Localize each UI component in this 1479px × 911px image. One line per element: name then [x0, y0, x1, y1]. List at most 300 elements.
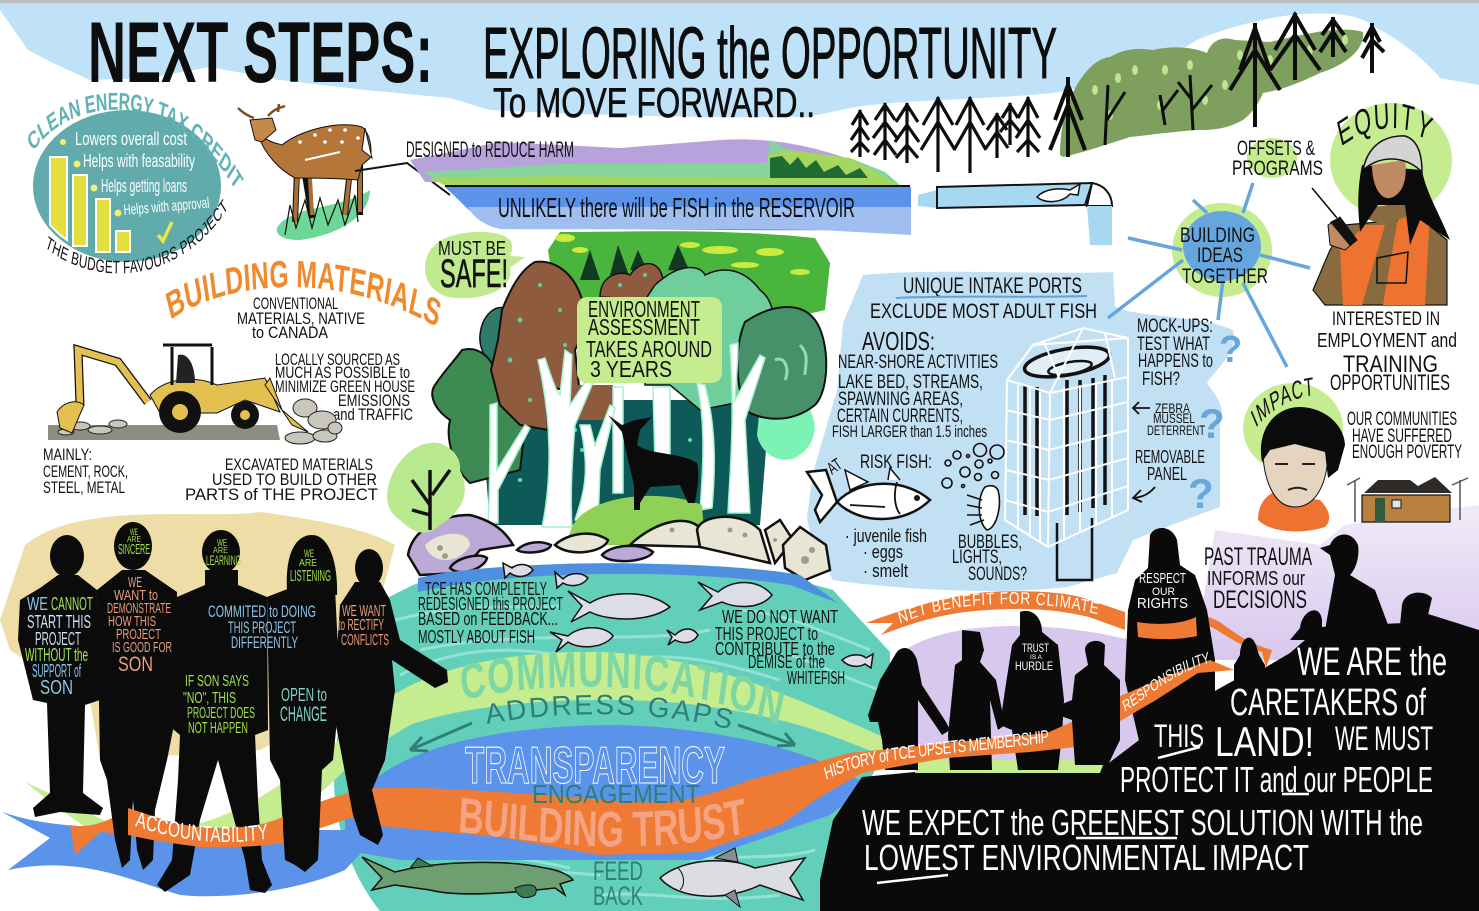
panel: silhouettes of people, left: SINCERE [118, 541, 150, 558]
text: locally sourced [275, 351, 415, 424]
text: removable panel: REMOVABLE [1135, 447, 1205, 467]
text: mock-ups: FISH? [1142, 369, 1180, 390]
cab body [150, 378, 280, 413]
lime circle [1243, 383, 1343, 473]
leader line from deer [355, 163, 450, 195]
figure with long hair [868, 648, 950, 770]
text: locally sourced: MUCH AS POSSIBLE to [275, 364, 410, 382]
text: zebra mussel deterrent: ? [1199, 400, 1225, 447]
black hill [820, 613, 1479, 911]
heading: building materials: BUILDING MATERIALS [166, 260, 440, 325]
rubble rocks right [285, 399, 342, 444]
banner text: NET BENEFIT FOR CLIMATE [898, 592, 1099, 624]
text: we are listening: WE [304, 548, 314, 560]
text: open to change: CHANGE [280, 703, 327, 726]
text: excavated materials: PARTS of THE PROJECT [185, 485, 378, 504]
text: excavated materials: USED TO BUILD OTHER [212, 470, 377, 489]
icon: intake tower [1005, 328, 1128, 580]
text: locally sourced: and TRAFFIC [333, 406, 413, 424]
text: commited to doing [208, 602, 316, 652]
text: avoids list [832, 326, 998, 441]
text: want to demonstrate [107, 574, 172, 676]
panel: impact [1243, 377, 1468, 532]
white cage [1005, 328, 1128, 547]
list of budget benefits: Helps getting loans [101, 176, 187, 196]
sash on tall figure [1137, 617, 1197, 639]
panel: clean energy tax credit [28, 92, 244, 274]
text: respect our rights [1137, 570, 1188, 612]
ribbon in front of figures [128, 808, 283, 847]
text: commited to doing: COMMITED to DOING [208, 602, 316, 621]
text: we are learning: ARE [213, 546, 228, 555]
text: tce redesigned: REDESIGNED this PROJECT [418, 594, 563, 614]
background: purple behind figures [905, 626, 1215, 765]
text: want to demonstrate: SON [118, 653, 153, 676]
callout: must be safe: MUST BE [438, 238, 506, 260]
antlers [238, 104, 285, 118]
text: conventional materials: MATERIALS, NATIVE [237, 309, 365, 328]
text: mainly materials: STEEL, METAL [43, 479, 125, 497]
text: we cannot start: CANNOT [51, 594, 93, 614]
panel: silhouettes of people, left: LEARNING [206, 552, 241, 568]
ribbon label: history of tce: HISTORY of TCE UPSETS MEMBERSHIP [824, 730, 1048, 780]
panel: equity [1311, 103, 1452, 306]
text: feed back [593, 856, 643, 911]
text: respect our rights: OUR [1152, 586, 1175, 598]
caption: designed to reduce harm: DESIGNED to REDUCE HARM [406, 137, 574, 162]
stem [1057, 518, 1092, 580]
icon: whitefish [660, 848, 805, 907]
text: son says no [183, 673, 255, 737]
text: son says no: NOT HAPPEN [188, 720, 248, 737]
text: past trauma: DECISIONS [1213, 586, 1307, 614]
hair [1261, 407, 1345, 478]
heading: to move forward: To MOVE FORWARD.. [493, 79, 815, 126]
digger bucket [57, 402, 84, 433]
text: locally sourced: LOCALLY SOURCED AS [275, 351, 400, 369]
pipe [937, 183, 1092, 208]
blue left tail [2, 812, 383, 896]
text: mainly materials: MAINLY: [43, 446, 92, 464]
small figure [1234, 638, 1265, 680]
text: employment and training: INTERESTED IN [1332, 309, 1440, 330]
text: we cannot start: WITHOUT the [25, 645, 88, 665]
banner: net benefit for climate [866, 591, 1272, 668]
bright mint tree [757, 403, 815, 460]
light water lines [380, 606, 880, 899]
brown tree dots [508, 273, 647, 402]
heading: next steps: NEXT STEPS: [88, 5, 433, 101]
pocket [1377, 252, 1408, 283]
highlights in right tree [775, 345, 806, 380]
panel: statement on hill [862, 543, 1447, 883]
text: respect our rights: RESPECT [1139, 570, 1186, 587]
text: mock-ups: ? [1219, 329, 1242, 371]
text: we cannot start: SUPPORT of [32, 661, 81, 681]
top ellipse [1022, 342, 1112, 382]
list of budget benefits: Helps with feasability [83, 151, 195, 171]
text: locally sourced: MINIMIZE GREEN HOUSE [275, 378, 415, 396]
text: we cannot start: PROJECT [35, 629, 81, 649]
text: want to demonstrate: PROJECT [116, 626, 161, 643]
panel: building ideas together [1108, 183, 1310, 367]
text: rectify conflicts: CONFLICTS [341, 632, 389, 649]
text: at risk fish: RISK FISH: [860, 452, 932, 473]
face [1372, 160, 1406, 198]
orange collar [1258, 493, 1329, 531]
text: we cannot start: START THIS [27, 612, 91, 632]
text: open to change: OPEN to [281, 685, 327, 705]
text: want to demonstrate: HOW THIS [108, 613, 156, 630]
fish [1037, 184, 1080, 202]
text: want to demonstrate: WANT to [114, 587, 158, 604]
panel: building materials [43, 260, 440, 504]
highlights [1092, 35, 1348, 120]
text: mock-ups: TEST WHAT [1137, 334, 1210, 355]
spots [298, 128, 360, 144]
inner cylinder [1025, 360, 1108, 519]
statement: we are the caretakers [862, 640, 1447, 878]
ground [48, 425, 280, 440]
cap man [1320, 534, 1390, 630]
text: mock-ups: MOCK-UPS: [1137, 316, 1213, 337]
panel: forest [387, 231, 830, 580]
text: tce redesigned: MOSTLY ABOUT FISH [418, 627, 535, 647]
green hill [1060, 30, 1363, 157]
panel: light blue intake ports [807, 272, 1242, 591]
rock speckles [437, 528, 815, 564]
statement: we are the caretakers: LAND! [1215, 718, 1314, 765]
text: mainly materials [43, 446, 128, 497]
body [258, 125, 371, 180]
text: employment and training [1317, 309, 1457, 395]
text: commited to doing: THIS PROJECT [228, 618, 296, 637]
text: avoids list: AVOIDS: [862, 326, 935, 356]
text: tce redesigned: TCE HAS COMPLETELY [425, 579, 547, 599]
text: juvenile fish list: · eggs [863, 542, 903, 562]
blue transparency band [345, 725, 870, 860]
text: building ideas together: IDEAS [1197, 244, 1243, 267]
text: removable panel: PANEL [1147, 464, 1187, 484]
arrows: address gaps [410, 723, 795, 751]
icon: cabin [1347, 477, 1468, 522]
text: conventional materials [237, 294, 365, 342]
text: whitefish [715, 607, 845, 688]
dark shore line [445, 185, 910, 187]
digger arm [78, 350, 148, 405]
icon: backhoe [48, 345, 342, 444]
loader arm and bucket [265, 378, 308, 432]
text: son says no: "NO", THIS [183, 690, 236, 707]
caption: unlikely fish: UNLIKELY there will be FISH in the RESERVOIR [498, 192, 855, 223]
text: mainly materials: CEMENT, ROCK, [43, 463, 128, 481]
text: offsets and programs: PROGRAMS [1232, 157, 1323, 180]
rubble rocks left [58, 420, 127, 435]
callout: environment assessment: 3 YEARS [590, 356, 672, 382]
text: whitefish: THIS PROJECT to [715, 624, 818, 644]
text: zebra mussel deterrent [1133, 400, 1225, 447]
text: avoids list: SPAWNING AREAS, [838, 389, 963, 410]
driver [176, 355, 195, 383]
icon: bubbles [942, 444, 1004, 530]
background: purple wash [1200, 505, 1479, 660]
silhouette group [18, 522, 448, 893]
grass blades [285, 195, 358, 235]
text: feed back: FEED [593, 856, 643, 886]
green shoreline [423, 140, 900, 187]
background: yellow wash [0, 512, 395, 760]
silhouettes: right group back row [868, 528, 1440, 770]
panel: silhouettes of people, left [18, 522, 448, 893]
text: whitefish: CONTRIBUTE to the [715, 639, 835, 659]
text: feed back: BACK [593, 881, 643, 911]
text: we are learning [206, 538, 241, 568]
tree line [770, 156, 868, 178]
text: past trauma: INFORMS our [1207, 568, 1305, 590]
title [88, 5, 1057, 126]
text: rectify conflicts: WE WANT [342, 603, 386, 620]
falling water [1087, 206, 1112, 245]
text: exclude adult fish: EXCLUDE MOST ADULT FISH [870, 300, 1097, 323]
text: conventional materials: to CANADA [252, 323, 329, 342]
panel: reservoir [406, 137, 911, 235]
text: want to demonstrate: IS GOOD FOR [112, 639, 172, 656]
jacket [1313, 218, 1447, 305]
teal circle [33, 110, 221, 262]
icon: pine tree row [851, 97, 1040, 173]
ribbon label: responsibility: RESPONSIBILITY [1122, 652, 1208, 712]
ribbon: orange trust band [70, 618, 1234, 898]
text: intake ports heading: UNIQUE INTAKE PORTS [903, 273, 1082, 298]
text: juvenile fish list: · juvenile fish [845, 526, 927, 546]
face [1263, 429, 1328, 507]
text: want to demonstrate: WE [128, 574, 142, 591]
text: mock-ups: HAPPENS to [1138, 351, 1213, 372]
dark green right tree [738, 307, 826, 419]
text: offsets and programs [1232, 137, 1323, 180]
brown lower tree [565, 385, 613, 420]
statement: we are the caretakers: THIS [1154, 718, 1204, 754]
dark teal tree [480, 307, 510, 365]
dark pines [1050, 13, 1384, 157]
callout: environment assessment: ENVIRONMENT [588, 296, 700, 322]
text: bubbles lights sounds [952, 532, 1027, 585]
text: past trauma [1204, 543, 1312, 614]
dark pines in canopy [580, 245, 690, 280]
brown main tree [491, 262, 585, 430]
text: avoids list: CERTAIN CURRENTS, [837, 406, 963, 427]
callout: environment assessment [577, 296, 722, 383]
text: conventional materials: CONVENTIONAL [253, 294, 338, 313]
heading underline [896, 296, 1087, 298]
tail [362, 128, 372, 158]
small wheel [231, 401, 259, 429]
text: trust is a hurdle: HURDLE [1015, 659, 1053, 673]
connecting rays [1108, 183, 1310, 367]
text: removable panel [1133, 447, 1214, 517]
text: juvenile fish list: · smelt [863, 561, 908, 581]
white birch trunks [488, 343, 765, 527]
text: juvenile fish list [845, 526, 927, 581]
bar chart [50, 157, 130, 252]
radio antenna [1312, 188, 1337, 218]
text: whitefish: WHITEFISH [787, 668, 845, 688]
big wheel [159, 391, 201, 433]
figure beside cap man [1290, 610, 1322, 640]
legs [295, 165, 360, 222]
text: we are listening: ARE [299, 558, 317, 569]
list of budget benefits: Lowers overall cost [75, 129, 187, 149]
ribbon label: accountability: ACCOUNTABILITY [135, 812, 267, 842]
purple mountains [410, 139, 883, 182]
text: son says no: PROJECT DOES [187, 705, 255, 722]
text: offsets and programs: OFFSETS & [1237, 137, 1315, 160]
text: at risk fish: AT [823, 455, 846, 478]
icon: child portrait [1258, 407, 1345, 531]
banner tail [1205, 616, 1272, 668]
bare branches [1105, 75, 1212, 145]
text: whitefish: DEMISE of the [748, 652, 825, 672]
lime circle [1330, 103, 1452, 217]
text: rectify conflicts: to RECTIFY [338, 617, 384, 634]
text: we are sincere [118, 527, 150, 558]
lime ground behind figures [915, 760, 1105, 773]
text: trust is a hurdle: TRUST [1022, 641, 1049, 655]
statement: we are the caretakers: LOWEST ENVIRONMENTAL IMPACT [864, 837, 1309, 878]
teal river body [334, 563, 890, 911]
lime tree branches [412, 470, 450, 530]
text: tce redesigned [418, 579, 563, 647]
text: zebra mussel deterrent: MUSSEL [1153, 410, 1195, 426]
callout: must be safe: SAFE! [440, 252, 508, 296]
list of budget benefits: Helps with approval [123, 195, 210, 219]
text: employment and training: TRAINING [1343, 351, 1438, 378]
text: avoids list: NEAR-SHORE ACTIVITIES [838, 352, 998, 373]
text: bubbles lights sounds: LIGHTS, [952, 547, 1002, 568]
brown tree upper right [600, 264, 663, 300]
icon: white fish [807, 468, 930, 522]
black bars [1025, 375, 1105, 516]
list of budget benefits [75, 129, 210, 219]
blue river surface [418, 563, 838, 603]
text: we are learning: WE [217, 538, 227, 549]
top browser line [0, 0, 1479, 3]
text: we are listening [290, 548, 331, 585]
icon: deer silhouette [608, 415, 698, 510]
lime halo [1172, 203, 1272, 297]
text: respect our rights: RIGHTS [1137, 595, 1188, 612]
figure: front right person [1058, 641, 1120, 765]
band label: communication: COMMUNICATION [461, 652, 784, 726]
dark green left tree [432, 349, 527, 483]
text: at risk fish [823, 452, 932, 478]
text: mock-ups [1137, 316, 1242, 390]
green communication band [335, 652, 890, 755]
ponytail figure [1400, 593, 1440, 625]
grass mound [565, 496, 705, 545]
text: excavated materials [185, 455, 378, 504]
lime shore [430, 150, 900, 188]
orange vest [1340, 212, 1430, 305]
text: building ideas together: TOGETHER [1182, 265, 1268, 288]
arc heading: equity: EQUITY [1337, 103, 1434, 146]
long hair [1358, 165, 1450, 245]
facial features [1275, 464, 1315, 490]
text: zebra mussel deterrent: DETERRENT [1147, 422, 1205, 438]
text: tce redesigned: BASED on FEEDBACK... [418, 609, 558, 629]
text: our communities [1347, 409, 1462, 463]
text: we are sincere: ARE [127, 535, 141, 544]
text: we are sincere: WE [130, 527, 138, 537]
text: removable panel: ? [1188, 470, 1214, 517]
pale lake [468, 207, 911, 235]
blue circle [1183, 211, 1261, 281]
dark trunks background [480, 400, 770, 525]
panel: river [2, 562, 890, 911]
icon: forested hill [1050, 13, 1384, 157]
icon: intake pipe with fish [918, 183, 1112, 245]
band label: address gaps: ADDRESS GAPS [487, 694, 732, 728]
text: avoids list: LAKE BED, STREAMS, [838, 372, 983, 393]
text: trust is a hurdle: IS A [1030, 655, 1042, 661]
underlines [877, 747, 1309, 883]
lime tree [387, 443, 465, 533]
head [250, 118, 276, 142]
icon: check mark [158, 222, 172, 241]
panel: silhouettes of people, left: LISTENING [290, 568, 331, 585]
text: building ideas together: BUILDING [1180, 224, 1255, 247]
band label: engagement: ENGAGEMENT [532, 779, 700, 809]
scarf collar [1363, 195, 1410, 225]
arc heading: impact: IMPACT [1250, 377, 1313, 427]
callout: environment assessment: TAKES AROUND [586, 336, 712, 362]
icon: deer [238, 104, 372, 240]
grass patch [277, 190, 370, 240]
arc caption: budget favours project: THE BUDGET FAVOURS PROJECT [48, 198, 226, 274]
canopy [163, 345, 212, 385]
bullet dots [60, 139, 122, 216]
tall figure [1125, 528, 1215, 745]
icon: worker [1312, 136, 1450, 305]
text: we cannot start [25, 594, 93, 699]
text: bubbles lights sounds: BUBBLES, [958, 532, 1022, 553]
callout: environment assessment: ASSESSMENT [588, 314, 700, 340]
text: want to demonstrate: DEMONSTRATE [107, 600, 171, 617]
text: zebra mussel deterrent: ZEBRA [1155, 400, 1190, 416]
left lime sweep [25, 735, 345, 858]
text: we cannot start: SON [40, 677, 73, 699]
text: trust is a hurdle [1015, 641, 1053, 673]
river stones [408, 515, 830, 580]
text: son says no: IF SON SAYS [185, 673, 249, 690]
band label: transparency: TRANSPARENCY [465, 737, 725, 795]
text: building ideas together [1180, 224, 1268, 288]
figure with cap [948, 630, 1005, 770]
ribbon label: building trust: BUILDING TRUST [460, 798, 744, 847]
mint tree [645, 267, 774, 410]
radio hand [1328, 217, 1357, 250]
lime highlights [555, 234, 810, 275]
hard hat [1363, 136, 1422, 172]
background sky [0, 3, 1479, 117]
text: whitefish: WE DO NOT WANT [722, 607, 838, 627]
text: we cannot start: WE [27, 594, 48, 614]
figure with trust shirt [1000, 611, 1064, 770]
lake [445, 187, 911, 230]
small fish [503, 563, 873, 668]
text: excavated materials: EXCAVATED MATERIALS [225, 455, 373, 474]
callout: must be safe [425, 232, 525, 298]
